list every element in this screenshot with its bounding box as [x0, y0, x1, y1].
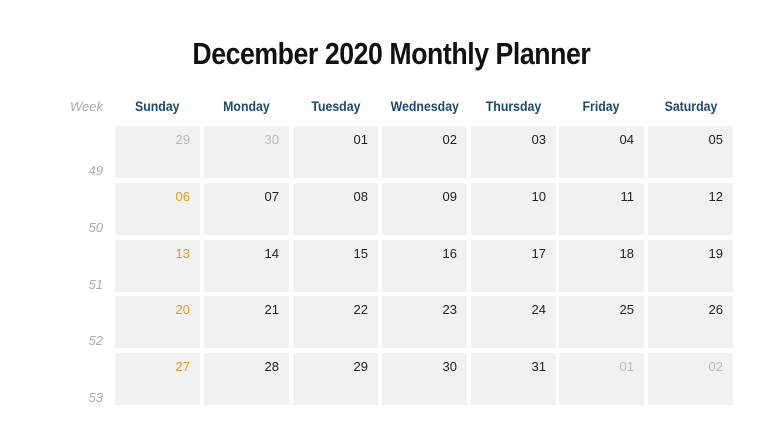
text: 07 — [265, 189, 279, 204]
text: Wednesday — [390, 98, 459, 114]
text: 23 — [443, 302, 457, 317]
text: 51 — [89, 277, 103, 292]
text: Thursday — [486, 98, 541, 114]
text: 53 — [89, 390, 103, 405]
text: 03 — [532, 132, 546, 147]
text: 24 — [532, 302, 546, 317]
text: 11 — [620, 189, 634, 204]
text: Saturday — [664, 98, 717, 114]
text: 29 — [176, 132, 190, 147]
text: 17 — [532, 246, 546, 261]
headers — [135, 98, 718, 114]
text: 28 — [265, 359, 279, 374]
text: 14 — [265, 246, 279, 261]
text: 30 — [443, 359, 457, 374]
text: 01 — [620, 359, 634, 374]
text: 13 — [176, 246, 190, 261]
text: 25 — [620, 302, 634, 317]
text: Friday — [583, 98, 620, 114]
text: 16 — [443, 246, 457, 261]
text: 10 — [532, 189, 546, 204]
text: 26 — [709, 302, 723, 317]
text: 19 — [709, 246, 723, 261]
text: 08 — [354, 189, 368, 204]
text: 29 — [354, 359, 368, 374]
text: Tuesday — [311, 98, 360, 114]
text: 05 — [709, 132, 723, 147]
text: 49 — [89, 163, 103, 178]
text: 15 — [354, 246, 368, 261]
text: 18 — [620, 246, 634, 261]
text: 12 — [709, 189, 723, 204]
text: 31 — [532, 359, 546, 374]
text: 52 — [89, 333, 103, 348]
text: 09 — [443, 189, 457, 204]
text: 30 — [265, 132, 279, 147]
text: 01 — [354, 132, 368, 147]
title: December 2020 Monthly Planner — [193, 36, 590, 71]
text: Monday — [223, 98, 270, 114]
week numbers — [88, 163, 103, 405]
text: 21 — [265, 302, 279, 317]
calendar grid — [115, 126, 733, 405]
text: 22 — [354, 302, 368, 317]
week label: Week — [70, 99, 103, 114]
text: 27 — [176, 359, 190, 374]
text: Sunday — [135, 98, 180, 114]
text: 20 — [176, 302, 190, 317]
text: 06 — [176, 189, 190, 204]
text: 02 — [443, 132, 457, 147]
text: 04 — [620, 132, 634, 147]
text: 02 — [709, 359, 723, 374]
text: 50 — [89, 220, 103, 235]
